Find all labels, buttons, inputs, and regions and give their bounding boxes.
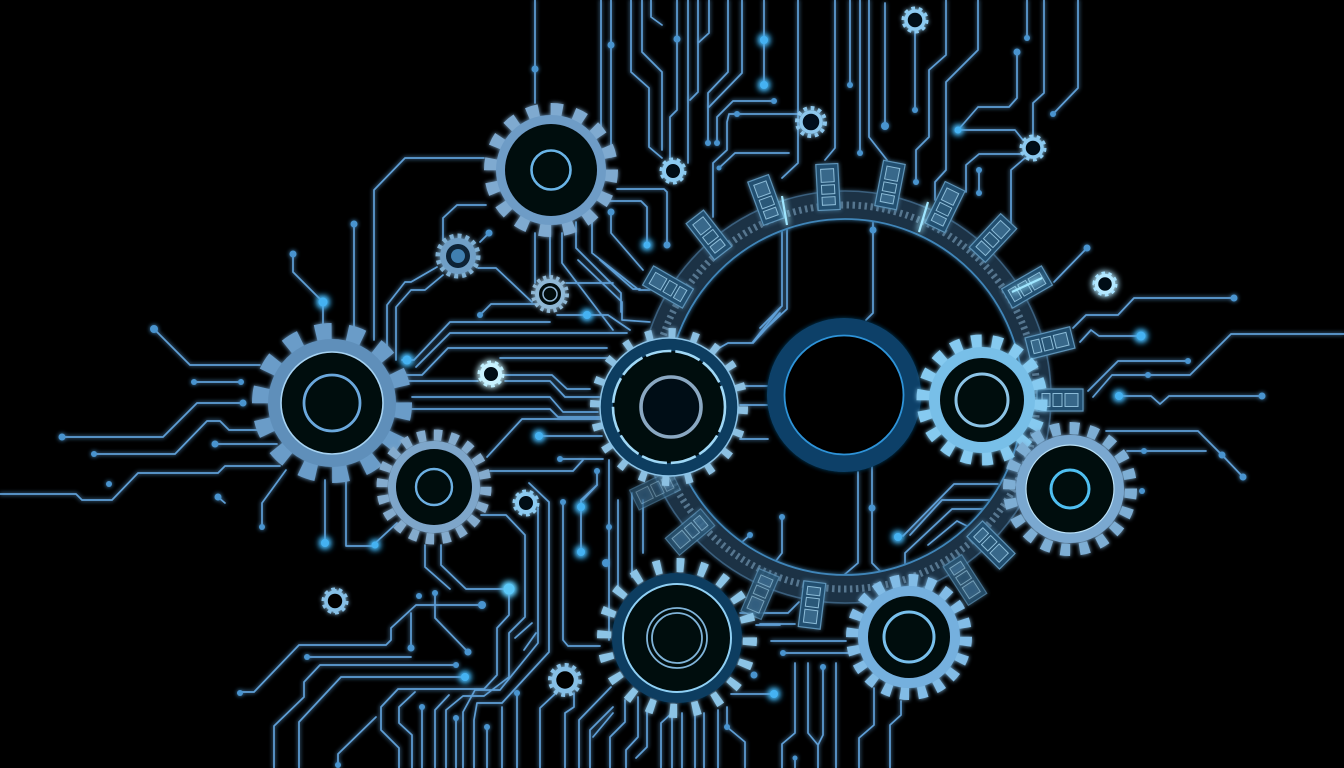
small gear 8 <box>661 159 685 183</box>
small gear 4 <box>514 491 538 515</box>
circuit traces: centre-left bus <box>400 189 780 500</box>
small gear 10 <box>1021 136 1045 160</box>
gear: left large <box>261 332 403 474</box>
gear: far right <box>1009 428 1131 550</box>
small gear 1 <box>438 236 478 276</box>
small gear 6 <box>550 665 580 695</box>
small gear 2 <box>533 277 567 311</box>
gear: centre dark <box>595 333 743 481</box>
small gears <box>323 8 1116 695</box>
small gear 5 <box>323 589 347 613</box>
gear: left small <box>382 435 486 539</box>
small gear 3 <box>479 362 503 386</box>
gear: right bright <box>923 341 1041 459</box>
bright joints on ring <box>782 196 1042 292</box>
gear: bottom dark <box>604 565 750 711</box>
circuit traces: bottom <box>237 460 901 768</box>
circuit traces: left <box>0 158 536 548</box>
gear: top <box>491 110 611 230</box>
small gear 11 <box>1094 273 1116 295</box>
circuit traces: right <box>775 244 1344 575</box>
small gear 7 <box>797 108 825 136</box>
ring band <box>639 191 1051 603</box>
centre ring <box>776 327 912 463</box>
circuit traces: top <box>532 0 1078 334</box>
ring modules <box>630 160 1083 629</box>
big ring with modules <box>630 160 1083 629</box>
small gear 9 <box>903 8 927 32</box>
gear: bottom right <box>852 580 966 694</box>
